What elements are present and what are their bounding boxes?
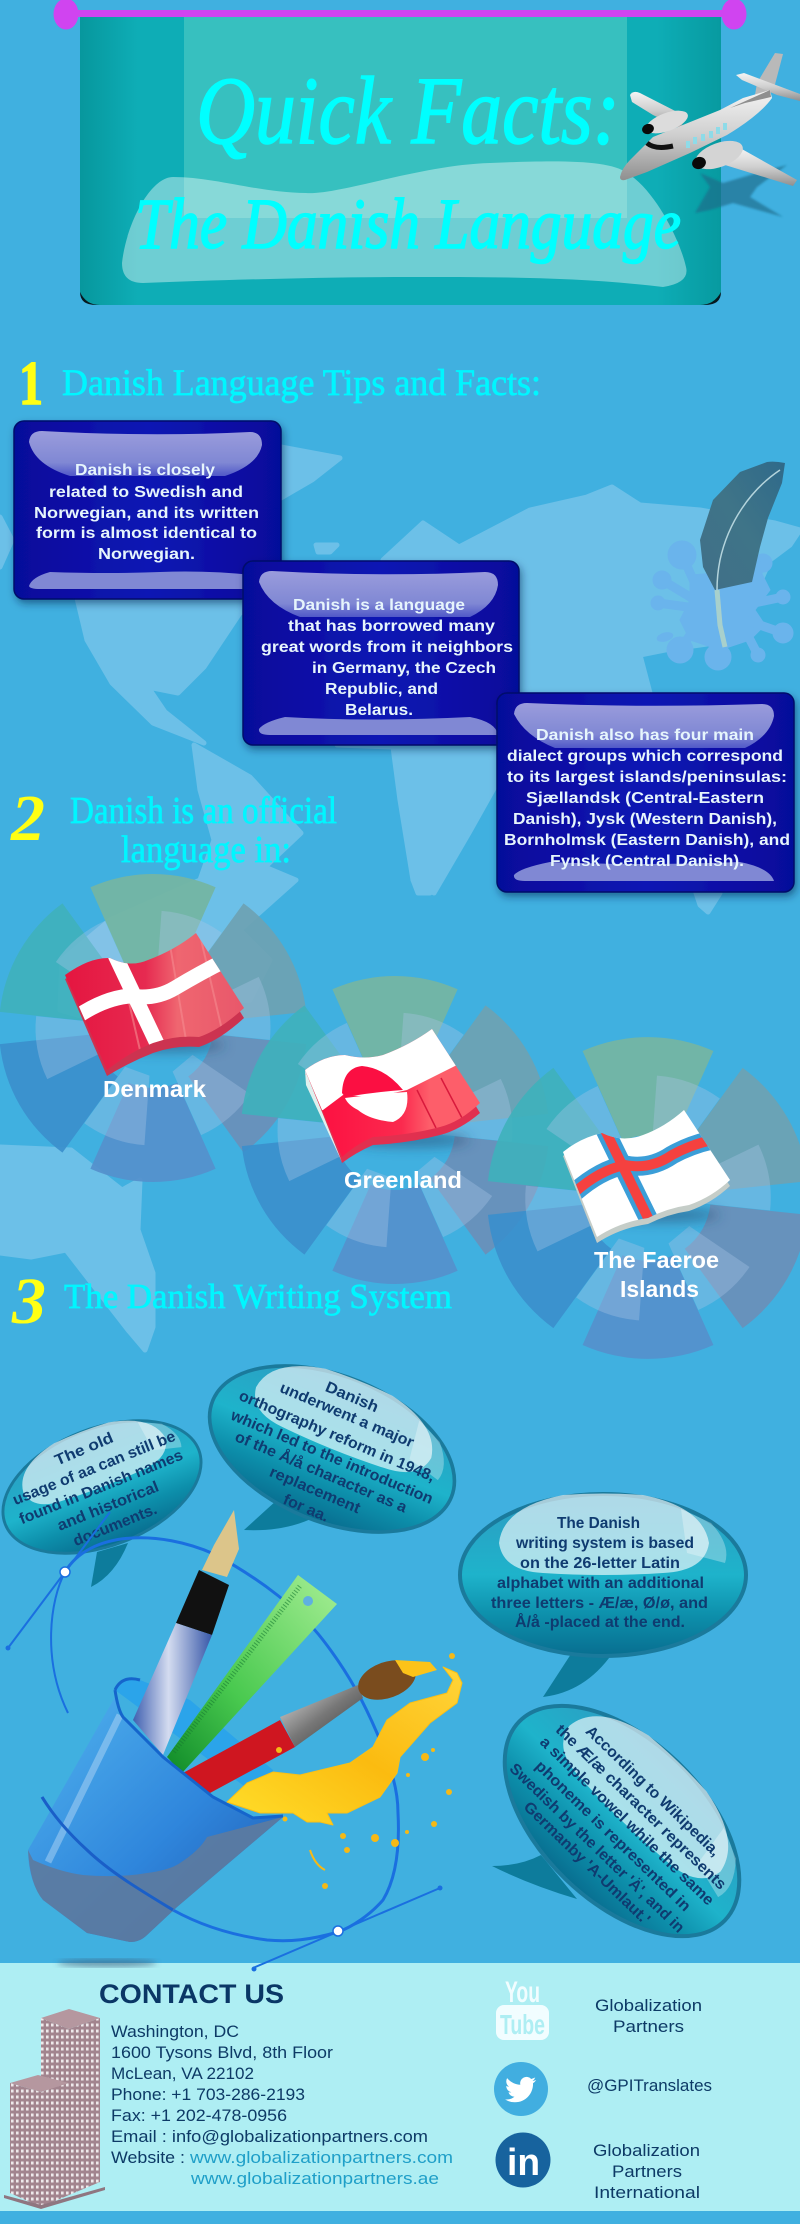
speech bubble: old usage of aa: documents. [71,1501,160,1550]
speech bubble: orthography reform: of the Å/å character as a [232,1428,410,1517]
contact section background [0,1963,800,2211]
panel: fact box 1 [14,421,281,599]
speech bubble: Danish writing system: Å/å -placed at the end. [515,1614,685,1631]
icon: LinkedIn [496,2132,550,2188]
speech bubble: orthography reform: Danish [323,1379,381,1416]
speech bubble: Danish writing system: The Danish [557,1515,640,1532]
icon: YouTube: Tube [500,2009,545,2040]
speech bubble: orthography reform: replacement [267,1464,363,1517]
flag shadows [105,1038,720,1222]
title: Quick Facts: [196,57,620,164]
icon: airplane [620,53,800,186]
panel: fact box 3: Bornholmsk (Eastern Danish), and [504,832,790,849]
title: The Danish Language [135,184,681,264]
speech bubble: Danish writing system: alphabet with an additional [497,1575,704,1592]
label: LinkedIn page: Partners [612,2162,682,2181]
panel: fact box 2: Republic, and [325,681,438,698]
speech bubble: old usage of aa: usage of aa can still be [10,1428,178,1509]
speech bubble: orthography reform: which led to the introduction [227,1407,435,1508]
heading 1 number: 1 [19,350,43,418]
cup shadow [57,1959,157,1967]
heading 2 [70,790,337,871]
heading 1: Danish Language Tips and Facts: [62,363,541,404]
panel: fact box 2: that has borrowed many [288,618,495,635]
speech bubble: Wikipedia note: According to Wikipedia, [582,1723,723,1860]
contact details: 1600 Tysons Blvd, 8th Floor [111,2043,333,2062]
panel: fact box 1: form is almost identical to [36,525,257,542]
contact details: www.globalizationpartners.ae [190,2169,439,2188]
heading 2 number: 2 [10,782,45,855]
label: LinkedIn page [593,2141,700,2202]
icon: airplane shadow [695,165,787,217]
panel: fact box 3: Danish), Jysk (Western Danish), [513,811,777,828]
contact details: Phone: +1 703-286-2193 [111,2085,305,2104]
icon: flag of Faroe Islands [563,1110,730,1243]
panel: fact box 3: Sjællandsk (Central-Eastern [526,790,764,807]
contact details: Email : info@globalizationpartners.com [111,2127,428,2146]
icon: office buildings [4,2009,105,2209]
speech bubble: Wikipedia note: Germanby 'A-Umlaut.' [520,1799,653,1928]
label: LinkedIn page: International [594,2183,700,2202]
label: YouTube channel: Globalization [595,1996,702,2015]
contact details: Fax: +1 202-478-0956 [111,2106,287,2125]
contact details [111,2022,453,2188]
contact details: Washington, DC [111,2022,239,2041]
panel: fact box 3: dialect groups which correspond [507,748,783,765]
panel: fact box 3: to its largest islands/peninsulas: [507,769,787,786]
panel: fact box 1: Norwegian. [98,546,195,563]
sunburst: Faeroe Islands [476,1037,800,1359]
contact details: www.globalizationpartners.com [189,2148,453,2167]
panel: fact box 2: great words from it neighbors [261,639,513,656]
title panel [80,17,721,305]
label: The Faeroe Islands: Islands [620,1276,699,1302]
speech bubble: old usage of aa [0,1395,220,1587]
speech bubble: orthography reform: for aa. [280,1491,331,1526]
icon: Twitter [494,2062,548,2116]
speech bubble: Wikipedia note: Swedish by the letter 'Ä', and in [506,1760,687,1936]
icon: LinkedIn: in [507,2142,540,2184]
label: YouTube channel [595,1996,702,2036]
panel: fact box 2: Belarus. [345,702,413,719]
panel: fact box 1: related to Swedish and [49,484,243,501]
speech bubble: Wikipedia note: the Æ/æ character represents [552,1721,729,1893]
label: Greenland: Greenland [344,1167,462,1193]
panel: fact box 1: Norwegian, and its written [34,505,259,522]
icon: flag of Greenland [305,1029,480,1163]
speech bubble: old usage of aa: The old [52,1430,116,1469]
label: LinkedIn page: Globalization [593,2141,700,2160]
panel: fact box 3 [497,693,794,892]
panel: fact box 2: Danish is a language [293,597,465,614]
icon: pens in cup [6,1510,462,1972]
speech bubble: old usage of aa: found in Danish names [17,1447,186,1528]
heading 3 number: 3 [11,1265,46,1338]
speech bubble: Danish writing system: writing system is based [515,1535,694,1552]
speech bubble: Danish writing system: on the 26-letter Latin [520,1555,680,1572]
label: Twitter handle: @GPITranslates [587,2076,712,2095]
speech bubble: Danish writing system [460,1494,746,1697]
speech bubble: Wikipedia note [463,1663,781,1979]
speech bubble: Danish writing system: three letters - Æ/æ, Ø/ø, and [491,1595,708,1612]
speech bubble: orthography reform: orthography reform in 1948, [236,1387,437,1486]
heading: contact us: CONTACT US [99,1979,284,2009]
icon: YouTube [496,1976,549,2040]
sunburst: Greenland [230,976,560,1284]
sunburst: Denmark [0,874,318,1182]
panel: fact box 2: in Germany, the Czech [312,660,496,677]
curtain rod [54,0,746,30]
icon: flag of Denmark [60,930,250,1076]
icon: YouTube: You [505,1976,540,2009]
speech bubble: orthography reform: underwent a major [277,1380,416,1451]
panel: fact box 1: Danish is closely [75,462,215,479]
title [135,57,681,264]
speech bubble: Wikipedia note: phoneme is represented in [532,1758,694,1915]
icon: feather and ink splash [651,462,793,670]
speech bubble: old usage of aa: and historical [55,1478,161,1535]
heading 2: Danish is an official [70,790,337,832]
speech bubble: Wikipedia note: a simple vowel while the same [536,1734,717,1909]
panel: fact box 2 [243,561,519,745]
label: The Faeroe Islands [594,1247,719,1302]
world map [0,447,800,1350]
contact details: Website : [111,2148,185,2167]
heading 3: The Danish Writing System [64,1277,452,1316]
panel: fact box 3: Danish also has four main [536,727,754,744]
panel: fact box 3: Fynsk (Central Danish). [550,853,744,870]
speech bubble: orthography reform [185,1333,479,1565]
heading 2: language in: [121,829,291,871]
label: The Faeroe Islands: The Faeroe [594,1247,719,1273]
contact details: McLean, VA 22102 [111,2064,254,2083]
label: Denmark: Denmark [103,1076,206,1102]
label: YouTube channel: Partners [613,2017,684,2036]
